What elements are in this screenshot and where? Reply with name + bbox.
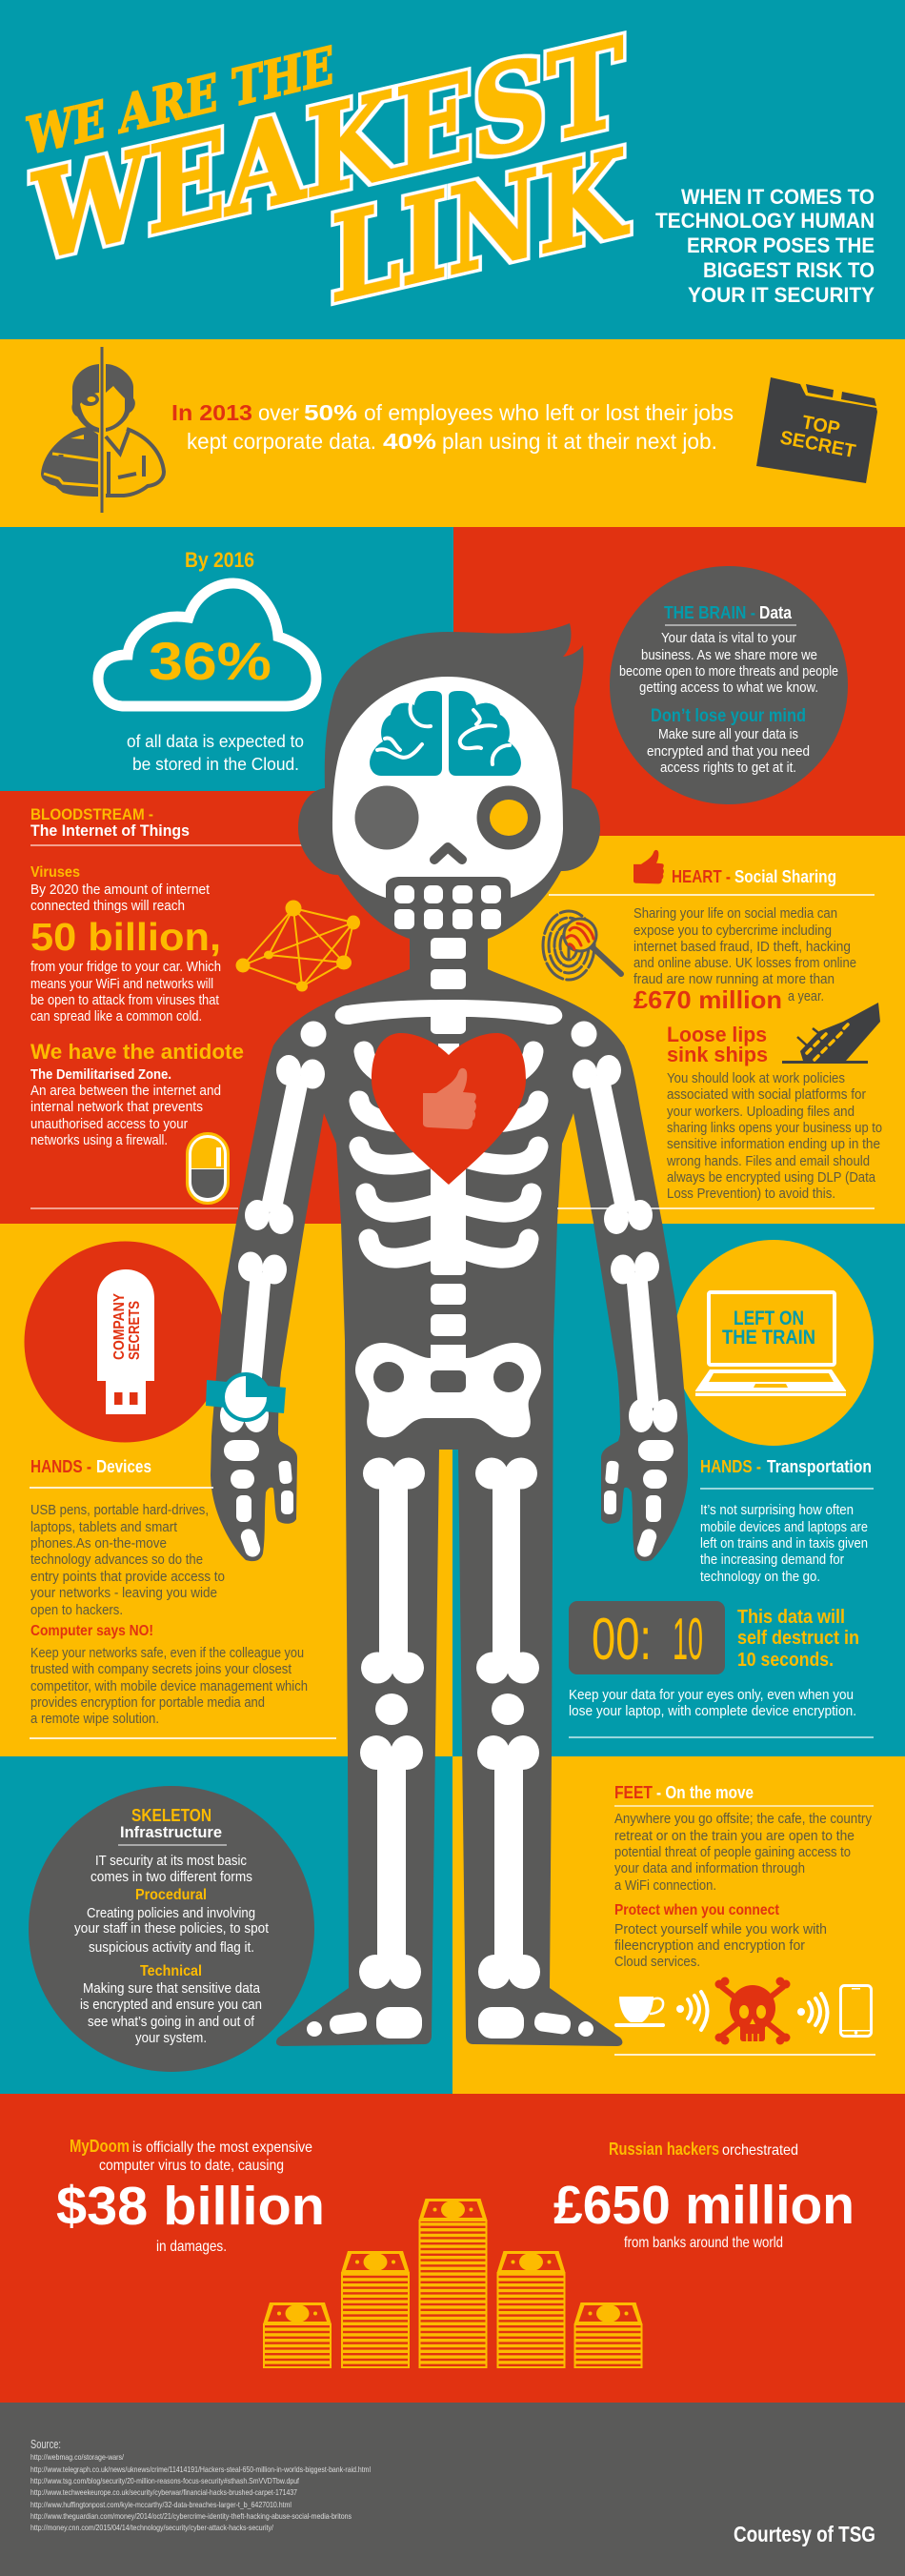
panel: feet on the move: Protect yourself while you work with (614, 1922, 827, 1937)
intro statistic text: kept corporate data. (187, 429, 376, 454)
panel: hands devices: competitor, with mobile device management which (30, 1679, 308, 1694)
panel: bloodstream internet of things: connected things will reach (30, 899, 185, 914)
panel: hands transportation: Keep your data for your eyes only, even when you (569, 1688, 854, 1703)
panel: skeleton infrastructure bubble: Creating policies and involving (87, 1906, 255, 1921)
panel: skeleton infrastructure bubble: your staff in these policies, to spot (74, 1921, 269, 1937)
panel: hands devices: your networks - leaving you wide (30, 1586, 217, 1601)
panel: the brain data bubble: encrypted and that you need (647, 744, 810, 760)
panel: heart social sharing: associated with social platforms for (667, 1087, 866, 1103)
icon: usb pen company secrets (25, 1241, 225, 1443)
panel: skeleton infrastructure bubble: comes in two different forms (90, 1870, 252, 1885)
callout: russian hackers statistic (553, 2140, 855, 2251)
callout: mydoom statistic: computer virus to date, causing (99, 2158, 284, 2174)
countdown timer: 10 (673, 1607, 703, 1673)
source list: http://webmag.co/storage-wars/ (30, 2452, 125, 2462)
panel: feet on the move: FEET (614, 1783, 653, 1802)
panel: skeleton infrastructure bubble: Procedural (135, 1887, 207, 1903)
panel: the brain data bubble: THE BRAIN - (664, 603, 755, 622)
panel: hands transportation: lose your laptop, with complete device encryption. (569, 1704, 856, 1719)
callout: russian hackers statistic: from banks around the world (624, 2235, 783, 2251)
panel: heart social sharing: expose you to cybercrime including (634, 923, 832, 939)
panel: skeleton infrastructure bubble: Infrastructure (120, 1823, 222, 1841)
subtitle: BIGGEST RISK TO (703, 258, 875, 282)
panel: the brain data bubble: Make sure all your data is (658, 727, 798, 742)
panel: hands devices: provides encryption for portable media and (30, 1695, 265, 1711)
head and hair (298, 623, 600, 939)
panel: heart social sharing: Loose lips (667, 1023, 767, 1046)
panel: the brain data bubble: access rights to get at it. (660, 761, 796, 776)
panel: skeleton infrastructure bubble: SKELETON (131, 1806, 211, 1825)
panel: hands transportation: mobile devices and laptops are (700, 1520, 868, 1535)
panel: bloodstream internet of things: unauthorised access to your (30, 1117, 188, 1132)
icon: red thumbs up (634, 850, 664, 883)
panel: bloodstream internet of things: By 2020 the amount of internet (30, 882, 210, 898)
callout: mydoom statistic: MyDoom (70, 2137, 130, 2156)
panel: bloodstream internet of things: from your fridge to your car. Which (30, 960, 221, 975)
intro statistic text: 40% (383, 429, 436, 454)
subtitle: WHEN IT COMES TO (681, 185, 875, 209)
icon: sinking ship (782, 1003, 880, 1064)
panel: hands transportation: 10 seconds. (737, 1650, 834, 1671)
panel: heart social sharing: Sharing your life on social media can (634, 906, 837, 922)
panel: bloodstream internet of things: networks using a firewall. (30, 1133, 168, 1148)
panel: heart social sharing: Social Sharing (734, 867, 836, 886)
subtitle: ERROR POSES THE (687, 233, 875, 257)
panel: feet on the move: your data and information through (614, 1861, 805, 1876)
cloud statistic: be stored in the Cloud. (132, 755, 299, 774)
panel: bloodstream internet of things: The Demilitarised Zone. (30, 1066, 171, 1083)
panel: feet on the move: - On the move (656, 1783, 754, 1802)
rib cage (359, 1051, 433, 1258)
subtitle: TECHNOLOGY HUMAN (655, 209, 875, 233)
panel: the brain data bubble: become open to more threats and people (619, 664, 838, 679)
panel: hands devices: entry points that provide access to (30, 1570, 225, 1585)
panel: heart social sharing: Loss Prevention) to avoid this. (667, 1187, 835, 1202)
panel: bloodstream internet of things: Viruses (30, 864, 80, 881)
title: LINK (331, 121, 630, 330)
cloud statistic: of all data is expected to (127, 732, 304, 751)
panel: bloodstream internet of things: internal network that prevents (30, 1100, 203, 1115)
panel: the brain data bubble: Your data is vital to your (661, 631, 796, 646)
panel: hands devices: laptops, tablets and smart (30, 1520, 177, 1535)
icon: usb pen company secrets: COMPANY (111, 1293, 128, 1360)
panel: heart social sharing: always be encrypted using DLP (Data (667, 1170, 876, 1186)
pelvis (355, 1343, 541, 1437)
callout: mydoom statistic: $38 billion (56, 2176, 325, 2237)
countdown timer: 00: (592, 1607, 652, 1673)
cloud statistic (98, 548, 316, 774)
icon: top secret folder (756, 377, 877, 483)
source list (30, 2437, 371, 2532)
panel: hands transportation: It’s not surprising how often (700, 1503, 854, 1518)
icon: wifi signal right (797, 1994, 827, 2032)
panel: bloodstream internet of things: means your WiFi and networks will (30, 977, 213, 992)
panel: skeleton infrastructure bubble: your system. (135, 2031, 207, 2046)
panel: skeleton infrastructure bubble: Making sure that sensitive data (83, 1981, 261, 1997)
panel: hands transportation: This data will (737, 1607, 845, 1628)
icon: laptop left on the train: LEFT ON (734, 1308, 804, 1329)
icon: wrist watch (206, 1372, 286, 1422)
panel: hands devices: HANDS - (30, 1457, 91, 1476)
panel: skeleton infrastructure bubble: suspicious activity and flag it. (89, 1940, 254, 1956)
icon: two-faced employee (41, 347, 164, 513)
icon: smartphone (840, 1986, 872, 2036)
panel: heart social sharing: internet based fraud, ID theft, hacking (634, 940, 851, 955)
intro statistic text: In 2013 (171, 400, 252, 425)
icon: laptop left on the train: THE TRAIN (722, 1327, 815, 1349)
cloud statistic: 36% (149, 631, 272, 691)
panel: feet on the move: potential threat of people gaining access to (614, 1845, 851, 1860)
icon: coffee cup (614, 1997, 665, 2027)
panel: skeleton infrastructure bubble: is encrypted and ensure you can (80, 1998, 262, 2013)
panel: feet on the move: Protect when you connect (614, 1902, 780, 1918)
source list: Source: (30, 2437, 61, 2451)
eye sockets (354, 785, 541, 860)
panel: heart social sharing: You should look at work policies (667, 1071, 845, 1086)
source list: http://www.huffingtonpost.com/kyle-mccarthy/32-data-breaches-larger-t_b_6427010.html (30, 2500, 292, 2509)
panel: bloodstream internet of things: 50 billion, (30, 915, 221, 959)
panel: hands devices: phones.As on-the-move (30, 1536, 167, 1552)
panel: hands transportation: self destruct in (737, 1628, 859, 1649)
icon: laptop left on the train (674, 1240, 874, 1446)
panel: feet on the move: Anywhere you go offsite; the cafe, the country (614, 1812, 873, 1827)
callout: mydoom statistic: in damages. (156, 2239, 227, 2255)
panel: bloodstream internet of things: can spread like a common cold. (30, 1009, 202, 1024)
chart: stacks of money (263, 2199, 642, 2367)
callout: russian hackers statistic: orchestrated (722, 2142, 798, 2159)
panel: hands transportation: Transportation (767, 1457, 872, 1476)
source list: http://www.techweekeurope.co.uk/security/cyberwar/financial-hacks-brushed-carpet-171437 (30, 2487, 297, 2497)
panel: hands transportation: HANDS - (700, 1457, 761, 1476)
intro statistic text (171, 400, 734, 454)
panel: heart social sharing: £670 million (634, 985, 782, 1014)
panel: hands devices: trusted with company secrets joins your closest (30, 1662, 292, 1677)
subtitle (655, 185, 875, 307)
title: WE ARE THE (26, 34, 333, 167)
countdown timer (569, 1601, 725, 1674)
icon: antidote capsule (187, 1134, 229, 1203)
source list: http://www.theguardian.com/money/2014/oct/21/cybercrime-identity-theft-hacking-abuse-social-media-britons (30, 2511, 352, 2521)
panel: heart social sharing: wrong hands. Files and email should (666, 1154, 870, 1169)
icon: top secret folder: SECRET (778, 427, 857, 462)
panel: feet on the move: fileencryption and encryption for (614, 1938, 805, 1954)
cloud statistic: By 2016 (185, 548, 254, 572)
panel: heart social sharing (549, 850, 882, 1209)
panel: the brain data bubble: business. As we share more we (641, 648, 817, 663)
source list: http://www.telegraph.co.uk/news/uknews/crime/11414191/Hackers-steal-650-million-in-worlds-biggest-bank-raid.html (30, 2464, 371, 2474)
panel: feet on the move (614, 1783, 875, 2056)
source list: http://money.cnn.com/2015/04/14/technology/security/cyber-attack-hacks-security/ (30, 2523, 274, 2532)
panel: heart social sharing: a year. (788, 989, 824, 1004)
panel: hands transportation: left on trains and in taxis given (700, 1536, 868, 1552)
panel: hands transportation: technology on the go. (700, 1570, 820, 1585)
panel: hands devices: Keep your networks safe, even if the colleague you (30, 1646, 304, 1661)
panel: bloodstream internet of things: We have the antidote (30, 1040, 244, 1064)
intro statistic text: of employees who left or lost their jobs (364, 400, 734, 425)
leg bones (307, 1458, 593, 2038)
callout: mydoom statistic: is officially the most expensive (132, 2140, 312, 2156)
panel: heart social sharing: fraud are now running at more than (634, 972, 835, 987)
intro statistic text: over (258, 400, 299, 425)
panel: bloodstream internet of things: An area between the internet and (30, 1084, 221, 1099)
panel: hands devices: Devices (96, 1457, 151, 1476)
panel: heart social sharing: sharing links opens your business up to (667, 1121, 882, 1136)
panel: bloodstream internet of things: BLOODSTREAM - (30, 805, 153, 823)
icon: wifi signal left (676, 1992, 707, 2030)
panel: bloodstream internet of things: be open to attack from viruses that (30, 993, 219, 1008)
teeth (394, 885, 501, 929)
panel: feet on the move: a WiFi connection. (614, 1878, 716, 1894)
panel: feet on the move: retreat or on the train you are open to the (614, 1829, 855, 1844)
callout: mydoom statistic (56, 2137, 325, 2255)
icon: brain (370, 691, 521, 776)
icon: top secret folder: TOP (800, 412, 842, 440)
panel: skeleton infrastructure bubble: see what’s going in and out of (88, 2015, 255, 2030)
panel: bloodstream internet of things (30, 805, 302, 1209)
icon: cloud (98, 583, 316, 706)
panel: hands devices: open to hackers. (30, 1603, 123, 1618)
panel: hands devices: USB pens, portable hard-drives, (30, 1503, 209, 1518)
icon: fingerprint and magnifier (543, 911, 621, 980)
panel: the brain data bubble (610, 566, 848, 804)
panel: hands devices: technology advances so do the (30, 1552, 203, 1568)
panel: heart social sharing: your workers. Uploading files and (667, 1105, 855, 1120)
icon: virus network (236, 900, 360, 991)
panel: skeleton infrastructure bubble (29, 1786, 314, 2072)
icon: usb pen company secrets: SECRETS (127, 1301, 143, 1360)
panel: the brain data bubble: Don’t lose your mind (651, 706, 806, 726)
panel: hands devices: Computer says NO! (30, 1623, 153, 1639)
panel: skeleton infrastructure bubble: Technical (140, 1963, 202, 1979)
panel: heart social sharing: and online abuse. UK losses from online (634, 956, 856, 971)
panel: heart social sharing: HEART - (672, 867, 731, 886)
panel: skeleton infrastructure bubble: IT security at its most basic (95, 1854, 247, 1869)
panel: heart social sharing: sink ships (667, 1043, 768, 1066)
panel: hands devices (30, 1457, 336, 1739)
intro statistic text: 50% (304, 400, 357, 425)
panel: bloodstream internet of things: The Internet of Things (30, 821, 190, 840)
subtitle: YOUR IT SECURITY (688, 283, 875, 307)
panel: the brain data bubble: Data (759, 603, 793, 622)
heart with thumb (372, 1033, 526, 1185)
callout: russian hackers statistic: £650 million (553, 2175, 855, 2236)
body silhouette (211, 929, 688, 2046)
panel: hands transportation (569, 1457, 874, 1738)
panel: the brain data bubble: getting access to what we know. (639, 680, 818, 696)
panel: heart social sharing: sensitive information ending up in the (667, 1137, 880, 1152)
icon: red skull and crossbones (714, 1977, 791, 2045)
intro statistic text: plan using it at their next job. (442, 429, 717, 454)
neck and spine (335, 938, 562, 1336)
skull (332, 677, 563, 898)
panel: feet on the move: Cloud services. (614, 1955, 700, 1970)
panel: hands transportation: the increasing demand for (700, 1552, 844, 1568)
courtesy credit: Courtesy of TSG (734, 2522, 875, 2546)
skeleton figure (206, 623, 688, 2046)
panel: hands devices: a remote wipe solution. (30, 1712, 159, 1727)
arm bones (220, 1022, 326, 1559)
callout: russian hackers statistic: Russian hackers (609, 2140, 719, 2159)
source list: http://www.tsg.com/blog/security/20-million-reasons-focus-security#sthash.SmVVDTbw.dpuf (30, 2476, 300, 2485)
